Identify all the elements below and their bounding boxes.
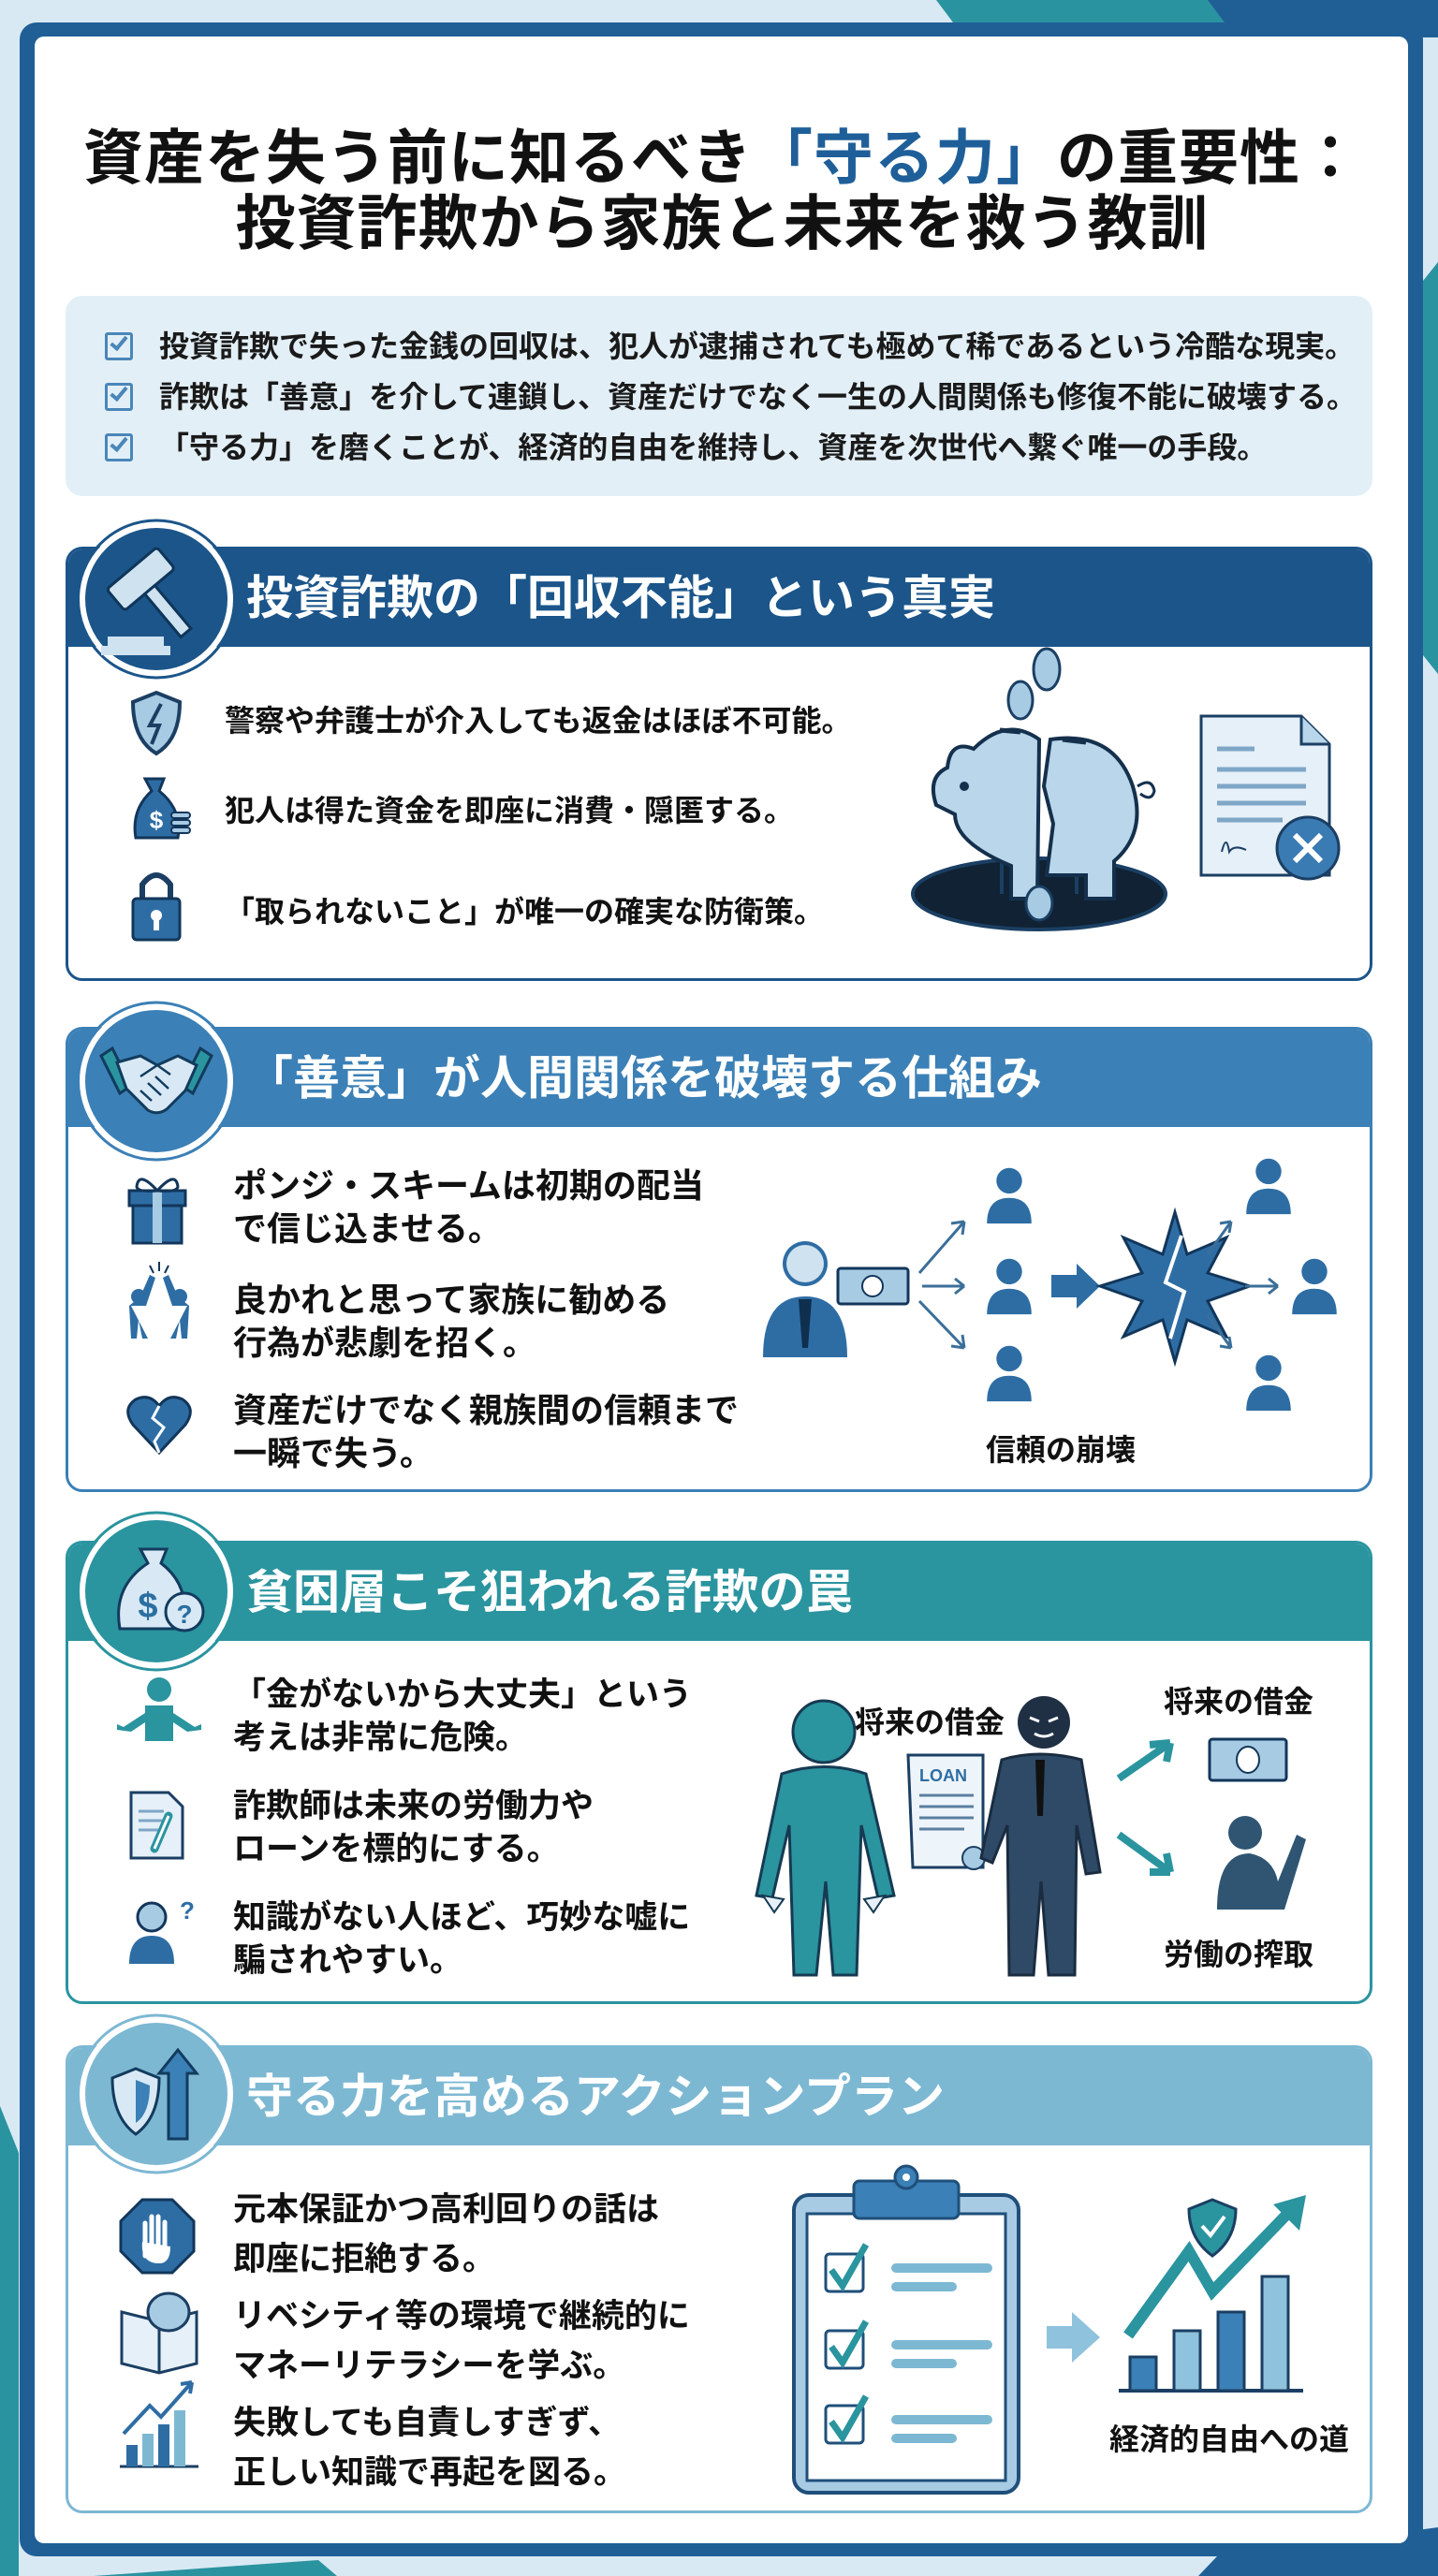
item 4-1 [233, 2191, 659, 2277]
title: 投資詐欺から家族と未来を救う教訓 [236, 190, 1210, 257]
icon: stop hand [121, 2200, 194, 2273]
icon circle: money bag question: ? [176, 1600, 193, 1629]
summary bullet 3: 「守る力」を磨くことが、経済的自由を維持し、資産を次世代へ繋ぐ唯一の手段。 [159, 431, 1267, 464]
icon circle: gavel [78, 520, 235, 678]
header 2 [68, 1030, 1370, 1127]
item 3-1: 「金がないから大丈夫」という [233, 1676, 692, 1713]
item 2-2 [233, 1281, 669, 1362]
icon: book brain [122, 2293, 197, 2373]
diagram: victim and scammer [756, 1696, 1306, 1975]
item 1-3: 「取られないこと」が唯一の確実な防衛策。 [225, 895, 824, 929]
item 3-2: 詐欺師は未来の労働力や [233, 1788, 594, 1824]
item 3-3 [233, 1899, 690, 1979]
label: road to freedom: 経済的自由への道 [1109, 2422, 1349, 2456]
icon: thinking person [129, 1896, 195, 1964]
item 4-3 [233, 2405, 626, 2491]
item 3-1 [233, 1676, 692, 1756]
label: future debt right: 将来の借金 [1164, 1685, 1313, 1719]
header 1: 投資詐欺の「回収不能」という真実 [246, 572, 995, 624]
item 4-2: リベシティ等の環境で継続的に [233, 2298, 690, 2334]
diagram: victim and scammer: LOAN [919, 1766, 967, 1785]
label: future debt left: 将来の借金 [855, 1705, 1005, 1739]
summary bullet 1: 投資詐欺で失った金銭の回収は、犯人が逮捕されても極めて稀であるという冷酷な現実。 [159, 329, 1355, 363]
item 3-3: 騙されやすい。 [233, 1942, 462, 1979]
item 2-2: 行為が悲劇を招く。 [233, 1324, 536, 1362]
diagram: money chain [763, 1159, 1337, 1411]
item 4-3: 正しい知識で再起を図る。 [233, 2454, 626, 2491]
icon: padlock [133, 875, 180, 940]
illustration: checklist clipboard [794, 2166, 1019, 2493]
illustration: rejected document [1201, 716, 1339, 879]
panel 2: goodwill [66, 1027, 1372, 1492]
icon: growth chart [120, 2382, 198, 2466]
item 2-1: で信じ込ませる。 [233, 1209, 502, 1248]
illustration: broken piggy bank in hole [913, 649, 1166, 929]
icon: thinking person: ? [180, 1896, 195, 1925]
item 3-2 [233, 1788, 594, 1867]
icon: broken heart [128, 1398, 190, 1453]
item 2-1: ポンジ・スキームは初期の配当 [233, 1166, 704, 1205]
summary bullet 2: 詐欺は「善意」を介して連鎖し、資産だけでなく一生の人間関係も修復不能に破壊する。 [159, 380, 1357, 414]
item 2-1 [233, 1166, 704, 1248]
icon: gift [129, 1179, 185, 1243]
label: trust collapse: 信頼の崩壊 [986, 1433, 1136, 1467]
item 1-1: 警察や弁護士が介入しても返金はほぼ不可能。 [225, 704, 851, 738]
icon: document chain [131, 1793, 183, 1858]
item 3-1: 考えは非常に危険。 [233, 1720, 528, 1756]
icon: money bag: $ [150, 806, 164, 834]
item 3-2: ローンを標的にする。 [233, 1831, 560, 1867]
item 4-1: 即座に拒絶する。 [233, 2241, 495, 2277]
icon: high five [129, 1262, 189, 1339]
item 4-3: 失敗しても自責しすぎず、 [233, 2405, 621, 2441]
item 1-2: 犯人は得た資金を即座に消費・隠匿する。 [225, 794, 794, 827]
item 2-3: 資産だけでなく親族間の信頼まで [233, 1391, 739, 1429]
summary box [66, 296, 1372, 496]
header 4: 守る力を高めるアクションプラン [246, 2071, 945, 2123]
item 2-3: 一瞬で失う。 [233, 1434, 433, 1472]
header 3: 貧困層こそ狙われる詐欺の罠 [246, 1566, 852, 1618]
panel 1: unrecoverable [66, 547, 1372, 981]
icon: shrugging person [117, 1677, 201, 1741]
illustration: rising chart with shield [1119, 2195, 1306, 2391]
icon circle: money bag question: $ [138, 1587, 158, 1626]
title [83, 124, 1361, 257]
arrow: to freedom [1047, 2312, 1100, 2363]
header 3 [68, 1544, 1370, 1641]
label: labor exploitation: 労働の搾取 [1164, 1938, 1313, 1971]
item 2-2: 良かれと思って家族に勧める [233, 1281, 669, 1319]
item 4-2 [233, 2298, 690, 2384]
icon circle: money bag question [78, 1513, 235, 1670]
icon: money bag [135, 779, 190, 838]
panel 3: poverty trap [66, 1541, 1372, 2004]
header 2: 「善意」が人間関係を破壊する仕組み [246, 1052, 1042, 1105]
header 4 [68, 2048, 1370, 2145]
header 1 [68, 549, 1370, 647]
icon circle: shield arrow [78, 2015, 235, 2173]
item 3-3: 知識がない人ほど、巧妙な嘘に [233, 1899, 690, 1936]
item 4-1: 元本保証かつ高利回りの話は [233, 2191, 659, 2228]
title: 資産を失う前に知るべき「守る力」の重要性： [83, 124, 1361, 192]
panel 4: action plan [66, 2045, 1372, 2513]
icon: shield lightning [133, 693, 180, 754]
item 4-2: マネーリテラシーを学ぶ。 [233, 2348, 625, 2384]
item 2-3 [233, 1391, 739, 1472]
icon circle: handshake [78, 1003, 235, 1160]
